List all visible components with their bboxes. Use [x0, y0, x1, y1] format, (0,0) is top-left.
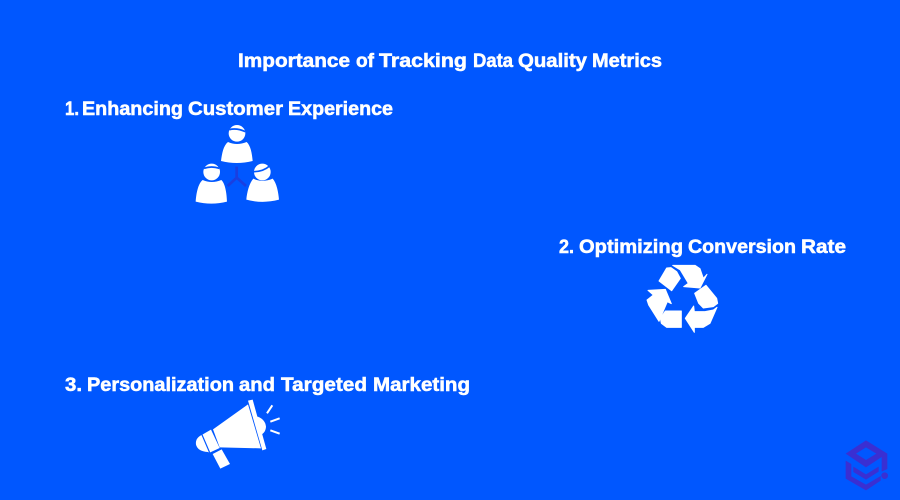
title: Quality: [518, 50, 587, 72]
icon: three people: [196, 125, 279, 204]
heading: customer experience: [65, 98, 393, 120]
heading: conversion rate: Optimizing: [579, 236, 683, 258]
heading: customer experience: Customer: [188, 98, 283, 120]
heading: conversion rate: Conversion: [688, 236, 796, 258]
logo: stacked cube: [846, 440, 888, 490]
heading: customer experience: 1.: [65, 98, 79, 120]
title: [238, 50, 662, 72]
heading: conversion rate: Rate: [801, 236, 846, 258]
heading: conversion rate: 2.: [559, 236, 574, 258]
heading: customer experience: Experience: [288, 98, 393, 120]
heading: conversion rate: [559, 236, 846, 258]
title: Data: [473, 50, 513, 72]
heading: personalization: Targeted: [281, 374, 367, 396]
heading: personalization: 3.: [65, 374, 82, 396]
title: Tracking: [379, 50, 467, 72]
title: Importance: [238, 50, 350, 72]
icon: recycle arrows: [647, 265, 718, 332]
title: of: [356, 50, 374, 72]
heading: personalization: [65, 374, 470, 396]
heading: personalization: and: [239, 374, 275, 396]
title: Metrics: [592, 50, 662, 72]
heading: customer experience: Enhancing: [82, 98, 183, 120]
heading: personalization: Marketing: [373, 374, 470, 396]
icon: megaphone: [196, 400, 280, 469]
heading: personalization: Personalization: [87, 374, 234, 396]
